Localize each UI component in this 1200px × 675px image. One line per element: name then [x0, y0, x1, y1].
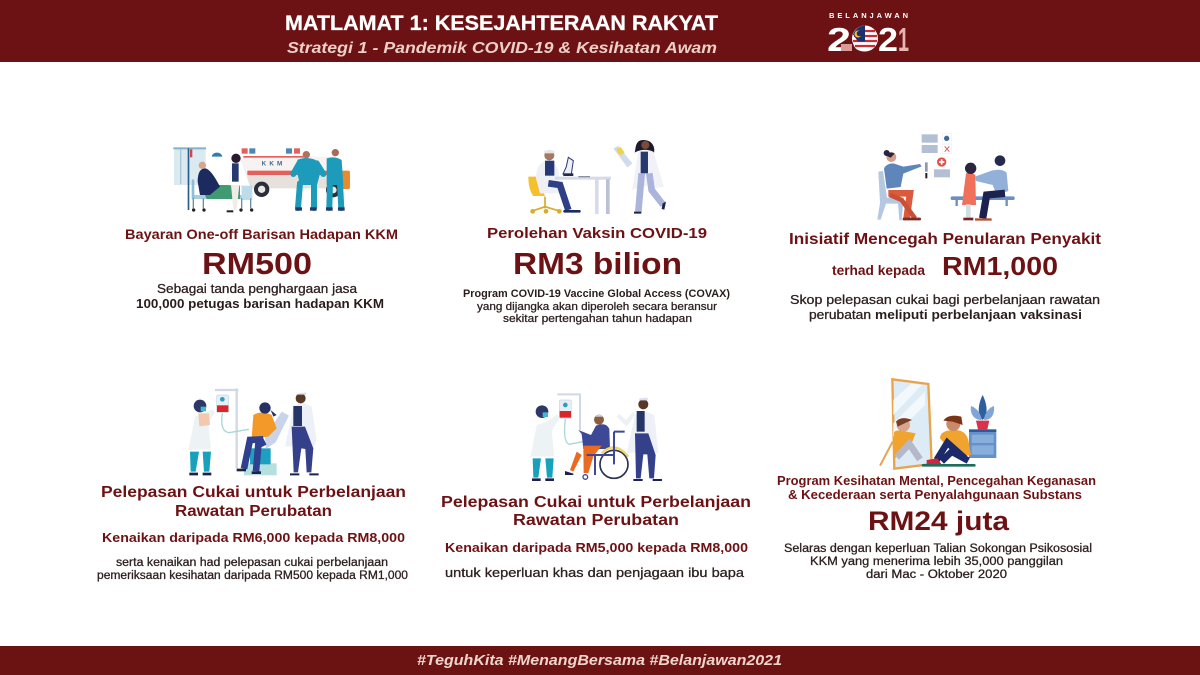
icon: nurse, elderly patient in wheelchair and doctor	[531, 393, 662, 481]
heading: Pelepasan Cukai untuk Perbelanjaan	[101, 484, 406, 501]
panel: program kesihatan mental	[777, 379, 1096, 581]
logo: Belanjawan 2021: 2	[827, 21, 851, 58]
icon: hospital bed, ambulance and paramedics	[173, 147, 350, 212]
heading	[777, 474, 1096, 502]
panel: inisiatif mencegah penularan penyakit	[789, 133, 1101, 322]
amount: RM24 juta	[868, 506, 1010, 536]
panel: bayaran one-off	[125, 147, 398, 311]
heading: Program Kesihatan Mental, Pencegahan Keganasan	[777, 474, 1096, 488]
heading	[441, 494, 751, 529]
icon: hospital bed, ambulance and paramedics: KKM	[262, 161, 282, 168]
heading	[101, 484, 406, 520]
description: perubatan	[809, 308, 871, 322]
heading: & Kecederaan serta Penyalahgunaan Substans	[788, 488, 1082, 502]
description	[784, 543, 1092, 581]
hashtags: #TeguhKita #MenangBersama #Belanjawan2021	[417, 653, 782, 669]
description: meliputi perbelanjaan vaksinasi	[875, 308, 1082, 322]
amount: RM3 bilion	[513, 246, 682, 281]
logo: Belanjawan 2021: 0	[851, 21, 877, 58]
amount: RM500	[202, 246, 312, 281]
header band	[0, 0, 1200, 62]
footer band	[0, 646, 1200, 675]
icon: doctor with child and parent	[877, 133, 1015, 221]
icon: scientist at microscope and doctor holding vaccine	[528, 140, 666, 214]
description: serta kenaikan had pelepasan cukai perbelanjaan	[116, 557, 388, 569]
panel: pelepasan cukai RM5,000	[441, 393, 751, 580]
amount	[832, 251, 1058, 281]
heading: Perolehan Vaksin COVID-19	[487, 225, 707, 242]
icon: nurse, patient on infusion and doctor	[188, 388, 319, 475]
title: MATLAMAT 1: KESEJAHTERAAN RAKYAT	[285, 12, 718, 35]
description	[790, 293, 1100, 322]
panel: pelepasan cukai RM6,000	[97, 388, 408, 582]
description: Program COVID-19 Vaccine Global Access (COVAX)	[463, 288, 730, 300]
increase note: Kenaikan daripada RM5,000 kepada RM8,000	[445, 540, 748, 555]
amount: terhad kepada	[832, 263, 925, 278]
logo: Belanjawan 2021: 1	[898, 21, 909, 58]
logo: Belanjawan 2021: BELANJAWAN	[829, 11, 908, 20]
subtitle: Strategi 1 - Pandemik COVID-19 & Kesihatan Awam	[287, 40, 717, 57]
description: untuk keperluan khas dan penjagaan ibu bapa	[445, 566, 744, 580]
description	[463, 288, 730, 325]
description: pemeriksaan kesihatan daripada RM500 kepada RM1,000	[97, 570, 408, 582]
logo: Belanjawan 2021: 2	[878, 21, 898, 58]
heading: Rawatan Perubatan	[175, 503, 332, 520]
amount: RM1,000	[942, 251, 1058, 281]
panel: perolehan vaksin	[463, 140, 730, 325]
heading: Rawatan Perubatan	[513, 512, 679, 529]
description	[136, 282, 384, 311]
logo: Belanjawan 2021	[827, 11, 909, 58]
description: Selaras dengan keperluan Talian Sokongan Psikososial	[784, 543, 1092, 555]
heading: Pelepasan Cukai untuk Perbelanjaan	[441, 494, 751, 511]
heading: Bayaran One-off Barisan Hadapan KKM	[125, 227, 398, 242]
description: yang dijangka akan diperoleh secara beransur	[477, 301, 717, 313]
description: Skop pelepasan cukai bagi perbelanjaan rawatan	[790, 293, 1100, 307]
icon: person sitting before mirror with plant	[880, 379, 996, 469]
description: 100,000 petugas barisan hadapan KKM	[136, 297, 384, 311]
description: Sebagai tanda penghargaan jasa	[157, 282, 357, 296]
description: sekitar pertengahan tahun hadapan	[503, 313, 692, 325]
heading: Inisiatif Mencegah Penularan Penyakit	[789, 231, 1101, 248]
increase note: Kenaikan daripada RM6,000 kepada RM8,000	[102, 530, 405, 545]
description: KKM yang menerima lebih 35,000 panggilan	[810, 556, 1063, 568]
description: dari Mac - Oktober 2020	[866, 569, 1007, 581]
description	[97, 557, 408, 582]
